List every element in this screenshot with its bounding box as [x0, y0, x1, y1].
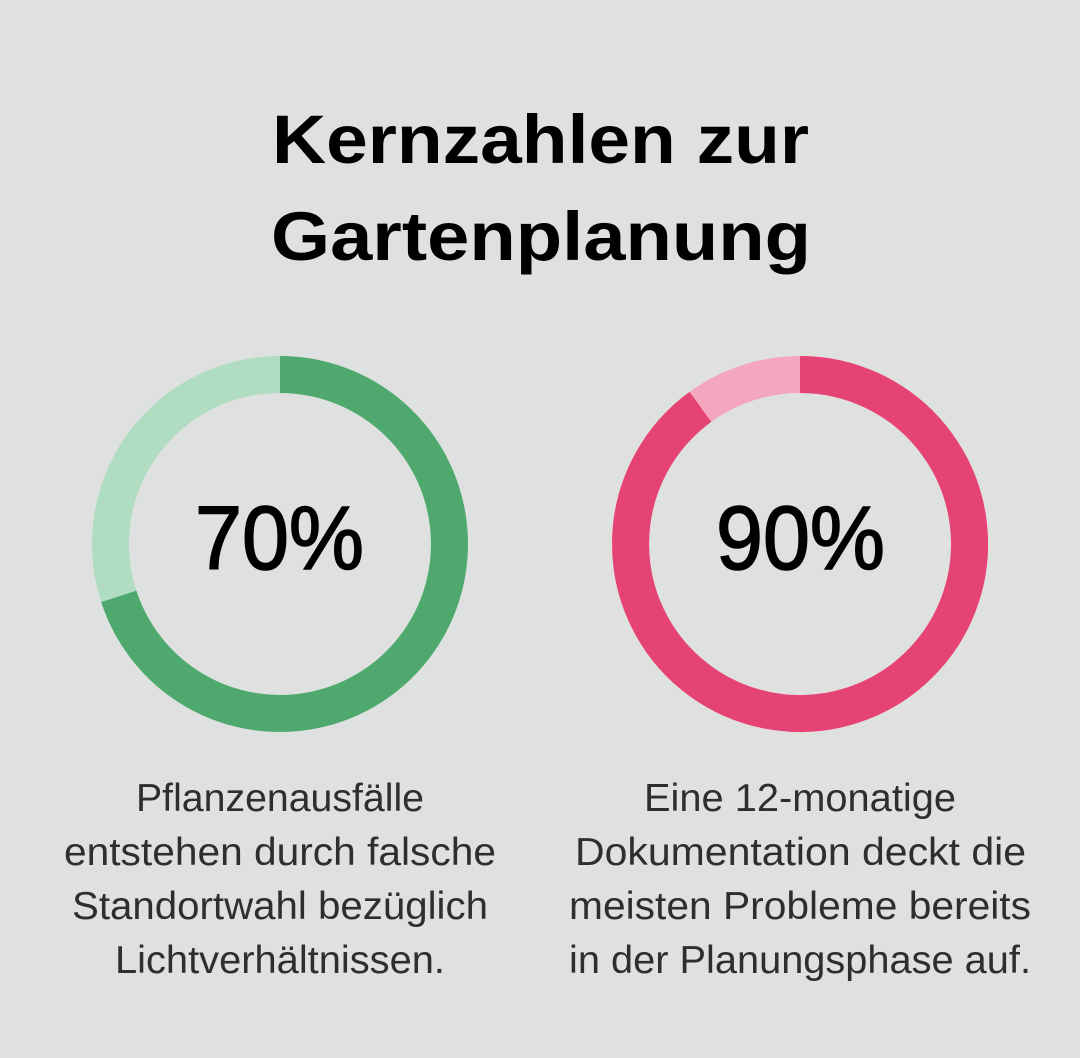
description: plant failures: Pflanzenausfälle — [136, 777, 424, 820]
title — [271, 101, 811, 275]
description: documentation: Eine 12-monatige — [644, 777, 956, 820]
panel: documentation — [569, 374, 1031, 982]
donut chart: 70% — [110, 374, 450, 714]
description: plant failures: entstehen durch falsche — [64, 831, 496, 874]
panel: plant failures — [64, 374, 496, 982]
description: plant failures: Lichtverhältnissen. — [115, 939, 445, 982]
description: documentation: meisten Probleme bereits — [569, 885, 1031, 928]
donut chart: 90% — [630, 374, 970, 714]
description: documentation: in der Planungsphase auf. — [569, 939, 1031, 982]
description: documentation — [569, 777, 1031, 982]
description: documentation: Dokumentation deckt die — [575, 831, 1026, 874]
value: 70%: 70% — [195, 489, 364, 589]
description: plant failures: Standortwahl bezüglich — [72, 885, 488, 928]
title: Gartenplanung — [271, 198, 811, 275]
value: 90%: 90% — [716, 489, 885, 589]
title: Kernzahlen zur — [272, 101, 809, 178]
description: plant failures — [64, 777, 496, 982]
